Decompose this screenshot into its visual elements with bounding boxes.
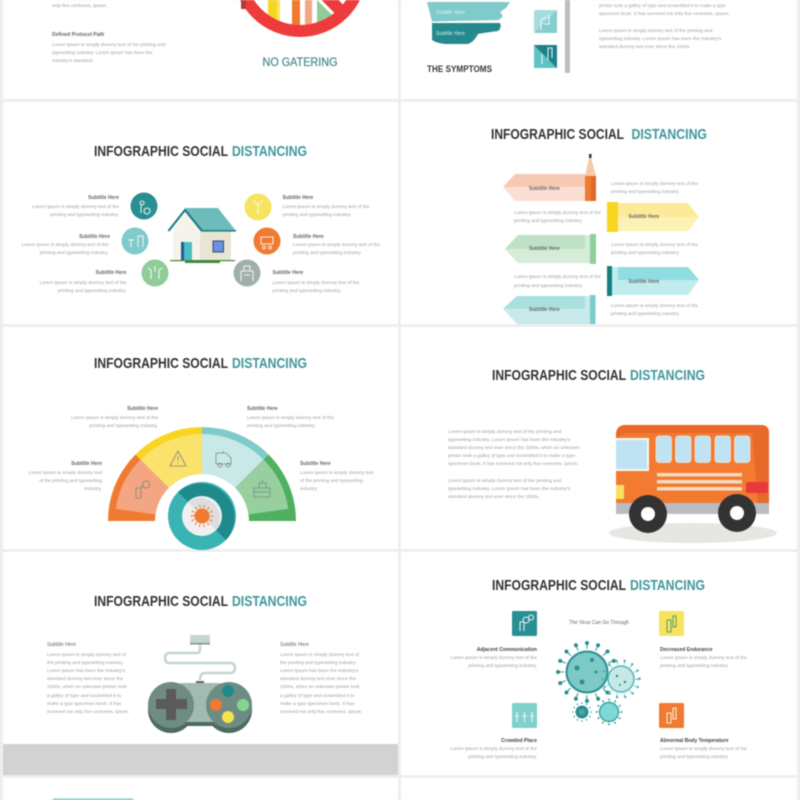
text block: row five: Lorem ipsum is simply dummy text of the: [611, 303, 698, 309]
text block: defined protocol path: [52, 32, 166, 64]
icon: medium virus: [602, 660, 640, 698]
text block: middle right: Subtitle Here: [293, 234, 324, 240]
panel: house infographic: [3, 102, 398, 324]
text block: right column: [280, 642, 362, 715]
text block: middle left: Lorem ipsum is simply dummy text of the: [22, 242, 109, 248]
text block: upper left: Lorem ipsum is simply dummy text of the: [32, 204, 119, 210]
text block: left column: standard dummy text ever since the: [47, 676, 123, 682]
text block: row three: printing and typesetting industry.: [611, 250, 680, 256]
text block: lower left: Lorem ipsum is simply dummy text of the: [40, 280, 127, 286]
text block: row four: Lorem ipsum is simply dummy text of the: [514, 274, 601, 280]
text block: bus description: specimen book. It has survived not only five centuries, Ipsum.: [448, 461, 579, 467]
icon: light teal square: [534, 10, 557, 33]
text block: left column: [47, 642, 129, 715]
icon: house: [168, 208, 236, 263]
text block: lorem paragraphs: standard dummy text ever since the 1500s.: [599, 44, 691, 50]
text block: right column: Lorem ipsum has been the industry's: [280, 668, 359, 674]
text block: row three: [611, 242, 698, 256]
icon: building: [254, 480, 270, 497]
text block: lorem paragraphs: specimen book. It has survived not only five centuries, Ipsum.: [599, 11, 730, 17]
footer band: [3, 744, 398, 775]
text block: lower right: [300, 461, 374, 492]
text block: upper right: [282, 195, 370, 218]
text block: lower right: Lorem ipsum is simply dummy text of the: [272, 280, 360, 286]
heading: no gatering: NO GATERING: [262, 55, 338, 69]
icon: light teal circle: [122, 228, 148, 254]
text block: defined protocol path: Defined Protocol Path: [52, 32, 104, 38]
text block: adjacent communication: printing and typesetting industry.: [468, 663, 537, 669]
text block: left column: make a type specimen book. It has: [47, 701, 122, 707]
text block: upper left: [71, 406, 158, 429]
icon: warning triangle: [170, 451, 186, 466]
text block: bus description: [448, 429, 580, 500]
title: DISTANCING: [232, 143, 307, 160]
text block: row one: printing and typesetting industry.: [611, 189, 680, 195]
text block: adjacent communication: Lorem ipsum is simply dummy text of the: [450, 655, 537, 661]
text block: left column: survived not only five centuries, ipsum.: [47, 709, 129, 715]
title: DISTANCING: [632, 126, 707, 143]
text block: bus description: standard dummy text ever since the 1500s.: [448, 494, 540, 500]
text block: abnormal temperature: Lorem ipsum is simply dummy text of the: [660, 746, 747, 752]
text block: right column: 1500s, when an unknown printer took: [280, 684, 360, 690]
icon: teal circle: [130, 192, 158, 220]
title: INFOGRAPHIC SOCIAL: [94, 143, 228, 160]
text block: lower right: of the printing and typesetting: [300, 478, 363, 484]
text block: middle right: printing and typesetting industry.: [293, 250, 362, 256]
text block: upper right: Lorem ipsum is simply dummy text of the: [282, 204, 370, 210]
panel: the symptoms: [401, 0, 797, 99]
icon: orange virus: [192, 506, 212, 526]
icon: yellow circle: [244, 194, 272, 220]
arrow: aqua pencil: [503, 295, 596, 324]
shape: lower symptom band: [432, 23, 501, 44]
text block: defined protocol path: Lorem ipsum is simply dummy text of the printing and: [52, 42, 166, 48]
text block: upper right: printing and typesetting industry.: [282, 212, 351, 218]
arrow: teal pencil: [607, 266, 699, 296]
icon: ambulance: [216, 451, 231, 467]
text block: upper left: Subtitle Here: [88, 195, 119, 201]
text block: left column: 1500s, when an unknown printer took: [47, 684, 127, 690]
text block: defined protocol path: typesetting industry. Lorem ipsum has been the: [52, 50, 153, 56]
text block: lower right: Subtitle Here: [300, 461, 331, 467]
text block: bus description: typesetting industry. Lorem Ipsum has been the industry's: [448, 486, 571, 492]
title: DISTANCING: [232, 355, 307, 372]
title: DISTANCING: [630, 367, 705, 384]
arrow: yellow pencil: [607, 202, 699, 232]
panel: no gathering: [3, 0, 398, 99]
text block: left column: the printing and typesetting industry.: [47, 660, 124, 666]
text: the virus can go through: The Virus Can Go Through: [569, 620, 629, 626]
icon: crossed-out crowd: [239, 0, 361, 31]
arrow: green pencil: Subtitle Here: [529, 246, 560, 252]
arrow: orange pencil: [503, 154, 596, 201]
text block: upper left: printing and typesetting industry.: [89, 423, 158, 429]
icon: adjacent communication: [512, 611, 537, 636]
title: INFOGRAPHIC SOCIAL: [492, 577, 626, 594]
text block: lower left: Subtitle Here: [96, 270, 127, 276]
icon: contact nodes: [136, 481, 150, 498]
chart: central virus donut: [168, 482, 236, 550]
text block: adjacent communication: [450, 647, 537, 669]
panel: game controller: [3, 552, 398, 775]
arrow: teal pencil: Subtitle Here: [628, 279, 660, 285]
text block: middle left: printing and typesetting industry.: [40, 250, 108, 256]
text block: decreased endurance: printing and typesetting industry.: [660, 663, 729, 669]
text block: row five: [611, 303, 698, 317]
icon: dark teal square: [534, 45, 557, 68]
panel: pencil arrows: [401, 102, 797, 324]
text block: lower right: Lorem ipsum is simply dummy text: [300, 470, 374, 476]
icon: game controller: [148, 635, 252, 733]
icon: small dark virus: [573, 703, 591, 721]
icon: grey circle: [234, 260, 260, 286]
title: INFOGRAPHIC SOCIAL: [492, 367, 626, 384]
icon: green circle: [142, 260, 168, 286]
title: INFOGRAPHIC SOCIAL: [491, 126, 624, 143]
title: INFOGRAPHIC SOCIAL: [94, 593, 228, 610]
text block: defined protocol path: industry's standard.: [52, 58, 93, 64]
panel: bottom right: [401, 778, 797, 800]
arrow: yellow pencil: Subtitle Here: [628, 214, 660, 220]
text block: lorem paragraphs: Lorem ipsum is simply dummy text of the printing and: [599, 28, 713, 34]
panel: bus: [401, 327, 797, 549]
shape: lower symptom band: Subtitle Here: [436, 31, 465, 37]
text block: right column: Subtitle Here: [280, 642, 309, 648]
title: INFOGRAPHIC SOCIAL: [94, 355, 228, 372]
text block: row one: Lorem ipsum is simply dummy text of the: [611, 181, 698, 187]
text block: abnormal temperature: [660, 738, 747, 760]
teal cap: [53, 798, 133, 800]
chart: semicircle segments: [108, 427, 296, 521]
text block: upper right: printing and typesetting industry.: [247, 423, 316, 429]
text block: right column: survived not only five centuries, ipsum.: [280, 709, 362, 715]
text block: lorem paragraphs: typesetting industry. Lorem Ipsum has been the industry's: [599, 36, 722, 42]
text block: crowded place: printing and typesetting industry.: [468, 754, 537, 760]
text block: lower right: [272, 270, 360, 294]
text block: middle left: Subtitle Here: [79, 234, 110, 240]
text block: row five: printing and typesetting industry.: [611, 311, 680, 317]
text block: left column: a galley of type and scrambled it to: [47, 693, 121, 699]
icon: orange circle: [254, 228, 280, 254]
panel: virus paths: [401, 552, 797, 775]
text block: row one: [611, 181, 698, 195]
text block: crowded place: Lorem ipsum is simply dummy text of the: [450, 746, 537, 752]
text block: lower left: industry.: [84, 486, 102, 492]
text block: middle right: Lorem ipsum is simply dummy text of the: [293, 242, 380, 248]
text block: lower right: industry.: [300, 486, 318, 492]
text block: upper left: Lorem ipsum is simply dummy text of the: [71, 415, 158, 421]
title: DISTANCING: [232, 593, 307, 610]
arrow: aqua pencil: Subtitle Here: [529, 307, 560, 313]
panel: semicircle gauge: [3, 327, 398, 550]
heading: the symptoms: THE SYMPTOMS: [427, 64, 492, 74]
text block: decreased endurance: Lorem ipsum is simply dummy text of the: [660, 655, 747, 661]
text block: right column: a galley of type and scrambled it to: [280, 693, 354, 699]
text block: lower left: [40, 270, 127, 294]
icon: crowded place: [512, 703, 537, 728]
text block: right column: standard dummy text ever since the: [280, 676, 356, 682]
icon: abnormal temperature: [659, 703, 684, 728]
text block: abnormal temperature: Abnormal Body Temperature: [660, 738, 729, 744]
text block: upper left: [32, 195, 119, 218]
text block: lorem paragraphs: printer took a galley of type and scrambled it to make a type: [599, 3, 726, 9]
text block: crowded place: Crowded Place: [501, 738, 537, 744]
text block: lower right: Subtitle Here: [272, 270, 304, 276]
shape: upper symptom band: [427, 2, 510, 22]
text block: upper left: printing and typesetting industry.: [50, 212, 119, 218]
text block: row two: Lorem ipsum is simply dummy text of the: [514, 210, 601, 216]
text block: decreased endurance: Decreased Endurance: [660, 647, 713, 653]
text block: upper right: Lorem ipsum is simply dummy text of the: [247, 415, 334, 421]
text block: upper right: Subtitle Here: [247, 406, 278, 412]
text block: left column: Subtitle Here: [47, 642, 76, 648]
text block: right column: Lorem ipsum is simply dummy text of: [280, 652, 360, 658]
text block: crowded place: [450, 738, 537, 760]
text block: lower left: [28, 461, 103, 492]
icon: decreased endurance: [659, 611, 684, 636]
text block: row two: [514, 210, 601, 224]
text block: bus description: standard dummy text ever since the 1500s, when an unknown: [448, 445, 580, 451]
text block: lower left: Subtitle Here: [71, 461, 102, 467]
text block: row two: printing and typesetting industry.: [514, 218, 583, 224]
divider bar: [565, 0, 570, 73]
shape: upper symptom band: Subtitle Here: [436, 10, 465, 16]
text block: upper right: [247, 406, 334, 429]
text block: right column: make a type specimen book. It has: [280, 701, 355, 707]
text block: right column: the printing and typesetting industry.: [280, 660, 357, 666]
arrow: orange pencil: Subtitle Here: [529, 186, 560, 192]
text block: lower left: Lorem ipsum is simply dummy text: [28, 470, 103, 476]
text block: lorem paragraphs: [599, 3, 730, 50]
text block: left column: Lorem ipsum has been the industry's: [47, 668, 126, 674]
icon: bus illustration: [609, 425, 777, 543]
text block: left column: Lorem ipsum is simply dummy text of: [47, 652, 127, 658]
text block: row four: printing and typesetting industry.: [514, 283, 583, 289]
text block: row three: Lorem ipsum is simply dummy text of the: [611, 242, 698, 248]
text block: protocol intro: only five centuries, Ipsum.: [52, 3, 107, 9]
text block: upper left: Subtitle Here: [127, 406, 158, 412]
arrow: green pencil: [505, 234, 596, 264]
text block: adjacent communication: Adjacent Communication: [477, 647, 537, 653]
text block: bus description: printer took a galley of type and scrambled it to make a type: [448, 453, 575, 459]
icon: small bright virus: [596, 700, 622, 724]
text block: bus description: Lorem ipsum is simply dummy text of the printing and: [448, 429, 562, 435]
panel: bottom left: [3, 778, 398, 800]
icon: large virus: [558, 643, 616, 701]
text block: lower left: of the printing and typesetting: [39, 478, 102, 484]
text block: row four: [514, 274, 601, 289]
text block: lower right: printing and typesetting industry.: [272, 288, 341, 294]
text block: bus description: typesetting industry. Lorem Ipsum has been the industry's: [448, 437, 571, 443]
text block: abnormal temperature: printing and typesetting industry.: [660, 754, 729, 760]
title: DISTANCING: [630, 577, 705, 594]
text block: decreased endurance: [660, 647, 747, 669]
text block: upper right: Subtitle Here: [282, 195, 314, 201]
text block: lower left: printing and typesetting industry.: [58, 288, 126, 294]
text block: middle left: [22, 234, 110, 256]
text block: middle right: [293, 234, 380, 256]
text block: bus description: Lorem ipsum is simply dummy text of the printing and: [448, 478, 562, 484]
